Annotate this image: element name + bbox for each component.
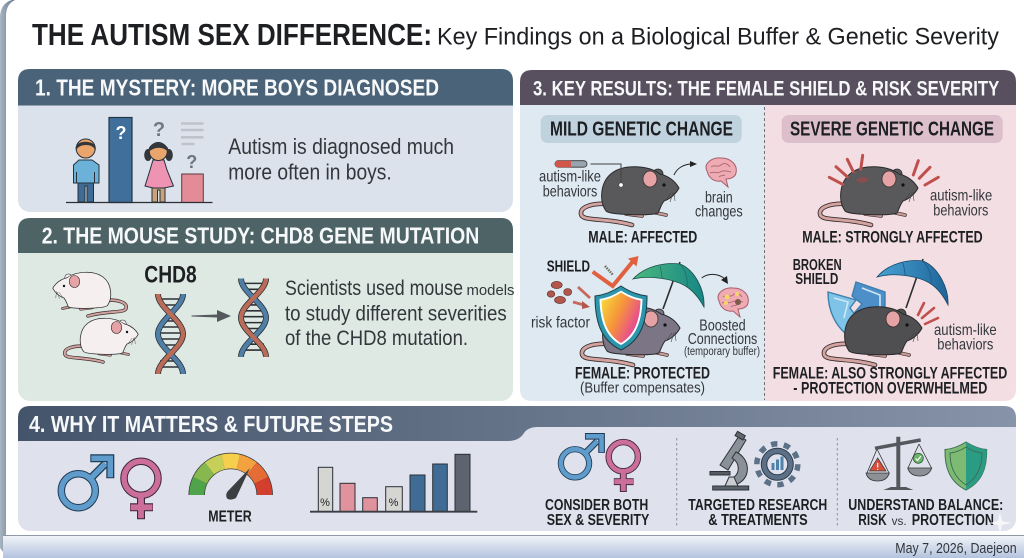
text: study description: to study different severities xyxy=(285,303,507,326)
label: female protected: FEMALE: PROTECTED xyxy=(575,364,710,382)
icon: white mouse top xyxy=(53,272,126,316)
text: study description xyxy=(285,277,514,350)
label: understand balance: PROTECTION xyxy=(912,512,994,529)
subheading: mild: MILD GENETIC CHANGE xyxy=(550,118,733,141)
arrow: to brain xyxy=(674,161,697,175)
text: mystery description xyxy=(228,134,454,184)
label: understand balance: RISK xyxy=(858,512,887,529)
icon: female symbol small xyxy=(609,442,638,492)
label: targeted research xyxy=(688,497,827,529)
bar: girls: ? xyxy=(186,152,197,172)
header: panel 4 xyxy=(18,406,1016,441)
label: CHD8: CHD8 xyxy=(144,262,197,289)
panel: why it matters xyxy=(18,406,1016,534)
label: male affected: MALE: AFFECTED xyxy=(588,229,697,247)
icon: boy xyxy=(74,139,99,202)
icon: white mouse bottom xyxy=(65,318,138,362)
label: consider both: SEX & SEVERITY xyxy=(547,512,650,529)
icon: rainbow shield xyxy=(595,286,647,350)
header: panel 4: 4. WHY IT MATTERS & FUTURE STEPS xyxy=(29,411,393,437)
header: panel 1: 1. THE MYSTERY: MORE BOYS DIAGNOSED xyxy=(35,75,439,101)
icon: DNA mutated xyxy=(241,278,266,357)
icon: risk factors xyxy=(547,281,590,309)
icon: female symbol large xyxy=(124,461,158,519)
label: boosted connections: (temporary buffer) xyxy=(684,346,760,358)
icon: male mouse, severe xyxy=(820,155,938,225)
panel: the mouse study xyxy=(18,218,514,401)
footer bar xyxy=(3,536,1024,558)
icon: boosted brain xyxy=(718,288,748,317)
text: study description: Scientists used mouse xyxy=(285,277,463,300)
icon: female mouse, severe xyxy=(824,303,938,365)
icon: severity meter xyxy=(197,461,265,500)
icon: girl xyxy=(144,142,174,202)
icon: balance scale xyxy=(866,437,932,490)
header: panel 1 xyxy=(18,69,513,106)
label: boosted connections: Boosted xyxy=(699,318,746,335)
label: shield: SHIELD xyxy=(547,259,590,276)
icon: female mouse, protected xyxy=(582,307,680,365)
title: Key Findings on a Biological Buffer & Genetic Severity xyxy=(437,24,1000,50)
icon: male mouse, mild xyxy=(581,164,679,225)
text: study description: of the CHD8 mutation. xyxy=(285,327,468,350)
subheading: mild xyxy=(541,115,742,143)
bar chart: % xyxy=(320,497,330,509)
icon: male symbol large xyxy=(61,458,110,508)
icon: DNA intact xyxy=(158,294,183,374)
label: broken shield: BROKEN xyxy=(793,257,842,274)
label: female strongly affected xyxy=(773,364,1007,397)
icon: male symbol small xyxy=(561,436,602,477)
icon: microscope xyxy=(710,431,749,490)
label: targeted research: & TREATMENTS xyxy=(708,512,808,529)
icon: chromosome xyxy=(555,161,587,167)
arrow: deflected risk xyxy=(593,256,638,286)
icon: brain xyxy=(706,158,736,187)
bar: boys: ? xyxy=(116,123,126,143)
title: THE AUTISM SEX DIFFERENCE: xyxy=(32,18,432,52)
label: broken shield: SHIELD xyxy=(795,271,838,288)
label: female protected xyxy=(575,364,710,397)
arrow: to boosted brain xyxy=(702,274,728,284)
panel: key results xyxy=(520,70,1016,401)
title xyxy=(32,18,1000,52)
label: consider both: CONSIDER BOTH xyxy=(545,497,648,514)
label: autism-like behaviors, mild male: behaviors xyxy=(543,184,597,201)
label: broken shield xyxy=(793,257,842,288)
bar chart: % xyxy=(389,497,399,509)
label: consider both xyxy=(545,497,650,529)
label: autism-like behaviors, mild male xyxy=(539,169,601,201)
label: autism-like behaviors, severe male xyxy=(930,188,992,220)
label: meter: METER xyxy=(208,509,252,526)
label: brain changes xyxy=(695,189,743,221)
bar: boys xyxy=(109,118,132,202)
icon: gear with chart xyxy=(757,444,798,485)
label: risk factor: risk factor xyxy=(531,315,591,332)
arrow: mutation xyxy=(192,310,231,322)
label: boosted connections: Connections xyxy=(688,331,757,348)
label: autism-like behaviors, mild male: autism-like xyxy=(539,169,601,186)
label: boosted connections xyxy=(684,318,760,358)
label: autism-like behaviors, severe male: behaviors xyxy=(933,203,988,220)
label: brain changes: changes xyxy=(695,204,743,221)
header: panel 2: 2. THE MOUSE STUDY: CHD8 GENE MUTATION xyxy=(42,222,479,248)
text: mystery description: more often in boys. xyxy=(228,159,392,184)
icon: green shield xyxy=(945,442,987,490)
icon: blue umbrella xyxy=(877,259,948,308)
bar: girls xyxy=(153,119,204,202)
icon: broken shield xyxy=(828,282,885,338)
header: panel 2 xyxy=(18,218,513,253)
text: study description: models xyxy=(466,282,514,299)
label: female protected: (Buffer compensates) xyxy=(580,380,705,397)
bar chart xyxy=(310,454,477,512)
icon: green umbrella xyxy=(633,262,704,309)
label: autism-like behaviors, severe female: behaviors xyxy=(937,336,993,353)
label: brain changes: brain xyxy=(705,189,733,206)
label: autism-like behaviors, severe male: autism-like xyxy=(930,188,992,205)
text: mystery description: Autism is diagnosed much xyxy=(228,134,454,159)
label: understand balance: vs. xyxy=(892,516,907,528)
label: autism-like behaviors, severe female: autism-like xyxy=(934,322,997,339)
label: autism-like behaviors, severe female xyxy=(934,322,997,353)
panel: the mystery xyxy=(18,69,513,212)
label: understand balance xyxy=(848,497,1012,534)
label: targeted research: TARGETED RESEARCH xyxy=(688,497,827,514)
bar: girls: ? xyxy=(153,119,165,141)
